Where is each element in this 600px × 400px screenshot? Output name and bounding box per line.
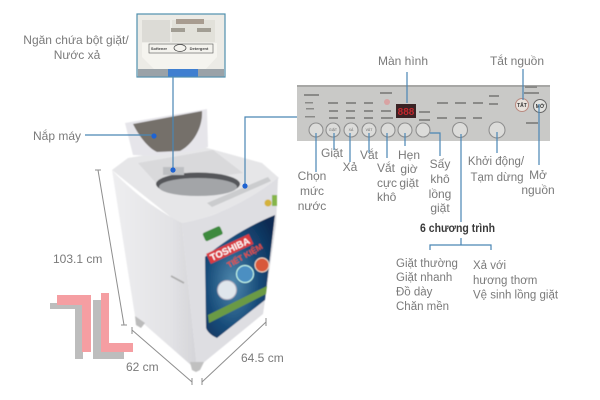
program list right: hương thơm [473,275,537,287]
label: spin: Vắt [360,147,379,162]
control strip on top [207,177,271,207]
callout dots [151,133,248,189]
program list right: Xả với [473,260,506,272]
slogan: TIẾT KIỆM [225,241,265,270]
panel buttons: TẮT [517,101,527,109]
inset: detergent drawer [137,14,225,77]
panel buttons: GIẶT [329,128,338,132]
label: power on: Mở [529,168,547,182]
program list left: Đồ dày [396,286,433,298]
panel buttons [309,98,546,138]
label: timer: Hẹn [398,148,420,162]
logo: 7L watermark [50,293,133,359]
drawer labels: Detergent [190,46,209,51]
label: tub dry: Sấy [430,157,450,171]
drawer labels [149,44,213,53]
connector lines [85,69,539,250]
control panel [297,85,550,141]
label: water level: nước [298,199,326,213]
label: power on: nguồn [521,183,555,197]
label: width: 64.5 cm [241,351,284,365]
tub back wall [138,150,243,184]
label: lid: Nắp máy [33,128,81,143]
label: timer: giặt [399,176,419,190]
panel small labels [304,86,539,124]
panel buttons: VẮT [366,127,373,132]
heading: 6 programs: 6 chương trình [420,223,495,235]
label: height: 103.1 cm [53,252,102,266]
label: timer: giờ [400,162,418,176]
label: start pause: Khởi động/ [468,156,524,168]
label: rinse: Xả [343,160,358,174]
program list left: Giặt thường [396,258,458,270]
label: start pause: Tạm dừng [470,172,524,184]
dimension lines [95,170,266,385]
open lid [125,109,208,156]
machine top [112,146,279,226]
energy stickers [202,226,223,242]
panel buttons: MỞ [536,103,545,110]
label: power off: Tắt nguồn [490,53,544,68]
side vent [171,276,184,283]
program list left: Giặt nhanh [396,272,452,284]
label: tub dry: lồng [429,187,451,201]
tub opening [156,172,240,196]
machine body side [112,170,197,368]
label: display: Màn hình [378,54,428,68]
detergent drawer in tub [163,167,184,175]
feet [135,316,145,328]
label: extra dry spin: Vắt [377,161,395,175]
label: water level: mức [300,184,324,198]
display [396,104,416,118]
label: detergent drawer: Nước xả [54,48,101,62]
label: extra dry spin: cực [377,176,397,190]
green band [208,286,267,323]
machine body front [182,178,278,368]
label: tub dry: khô [430,172,450,186]
control panel: 888 [398,107,415,118]
label: detergent drawer: Ngăn chứa bột giặt/ [23,33,129,47]
label: depth: 62 cm [126,360,159,374]
program list left: Chăn mền [396,301,449,313]
brand panel [205,215,275,338]
drawer labels: Softener [151,46,168,51]
washing machine [112,109,279,372]
label: wash: Giặt [321,146,344,160]
panel buttons: XẢ [349,127,354,132]
program list right: Vệ sinh lồng giặt [473,290,559,302]
label: tub dry: giặt [430,201,450,215]
feature badges [218,280,236,300]
brand name: TOSHIBA [209,236,252,264]
label: extra dry spin: khô [377,190,397,204]
label: water level: Chọn [298,169,326,183]
